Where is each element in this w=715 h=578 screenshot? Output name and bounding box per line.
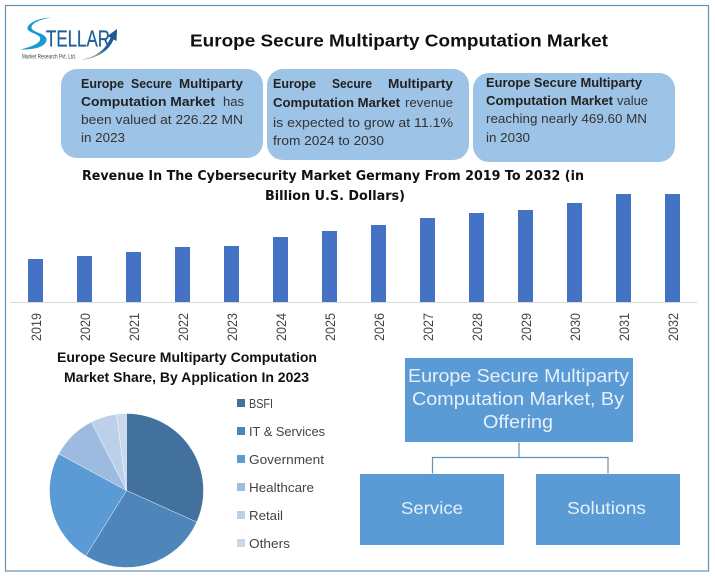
bar chart heading: Billion U.S. Dollars) bbox=[265, 189, 405, 204]
logo: Stellar Market Research: Market Research Pvt. Ltd. bbox=[22, 54, 76, 60]
bar chart: revenue 2019-2032 bbox=[10, 194, 697, 341]
callout: valued in 2023 bbox=[61, 69, 263, 158]
bar chart heading: Revenue In The Cybersecurity Market Germany From 2019 To 2032 (in bbox=[82, 169, 584, 184]
bar chart: revenue 2019-2032: 2027 bbox=[421, 313, 436, 341]
logo: Stellar Market Research: TELLAR bbox=[46, 26, 110, 52]
box: by offering: Europe Secure Multiparty bbox=[408, 365, 630, 386]
callout: value in 2030 bbox=[473, 73, 675, 162]
box: service bbox=[360, 474, 504, 545]
bar chart: revenue 2019-2032: 2020 bbox=[78, 313, 93, 341]
bar chart: revenue 2019-2032: 2026 bbox=[372, 313, 387, 341]
bar chart: revenue 2019-2032: 2024 bbox=[274, 313, 289, 341]
pie legend: BSFI bbox=[249, 396, 273, 411]
bar chart: revenue 2019-2032: 2023 bbox=[225, 313, 240, 341]
box: by offering: Offering bbox=[483, 411, 553, 432]
bar chart: revenue 2019-2032: 2021 bbox=[127, 313, 142, 341]
bar chart: revenue 2019-2032: 2032 bbox=[666, 313, 681, 341]
box: solutions bbox=[536, 474, 680, 545]
callout: valued in 2023: has bbox=[223, 95, 244, 109]
callout: growth rate: from 2024 to 2030 bbox=[273, 134, 384, 148]
pie legend bbox=[237, 396, 325, 551]
bar chart heading bbox=[82, 169, 584, 204]
box: service: Service bbox=[401, 498, 463, 518]
bar chart: revenue 2019-2032: 2029 bbox=[519, 313, 534, 341]
callout: growth rate: Multiparty bbox=[388, 77, 453, 91]
bar chart: revenue 2019-2032: 2031 bbox=[617, 313, 632, 341]
callout: growth rate: is expected to grow at 11.1% bbox=[273, 116, 453, 130]
pie legend: IT & Services bbox=[249, 424, 325, 439]
bar chart: revenue 2019-2032: 2019 bbox=[29, 313, 44, 341]
callout: valued in 2023: Secure bbox=[131, 77, 172, 91]
logo: Stellar Market Research bbox=[20, 18, 117, 60]
callout: valued in 2023: Multiparty bbox=[179, 77, 243, 91]
pie chart heading: Europe Secure Multiparty Computation bbox=[57, 350, 317, 365]
box: by offering bbox=[405, 358, 633, 442]
callout: growth rate: revenue bbox=[405, 96, 453, 110]
box: by offering: Computation Market, By bbox=[412, 388, 625, 409]
callout: value in 2030: value bbox=[617, 94, 648, 108]
pie chart heading: Market Share, By Application In 2023 bbox=[64, 370, 310, 385]
callout: growth rate: Secure bbox=[332, 77, 372, 91]
pie legend: Others bbox=[249, 536, 291, 551]
callout: growth rate: Computation Market bbox=[273, 96, 401, 110]
bar chart: revenue 2019-2032: 2025 bbox=[323, 313, 338, 341]
bar chart: revenue 2019-2032: 2028 bbox=[470, 313, 485, 341]
callout: valued in 2023: Computation Market bbox=[81, 95, 216, 109]
pie chart heading bbox=[57, 350, 317, 385]
callout: valued in 2023: Europe bbox=[81, 77, 124, 91]
callout: value in 2030: in 2030 bbox=[486, 131, 530, 145]
callout: value in 2030: reaching nearly 469.60 MN bbox=[486, 112, 647, 126]
title: Europe Secure Multiparty Computation Market bbox=[190, 30, 608, 50]
pie legend: Government bbox=[249, 452, 324, 467]
bar chart: revenue 2019-2032: 2022 bbox=[176, 313, 191, 341]
callout: growth rate: Europe bbox=[273, 77, 316, 91]
box: solutions: Solutions bbox=[567, 498, 646, 518]
pie legend: Healthcare bbox=[249, 480, 314, 495]
callout: valued in 2023: in 2023 bbox=[81, 131, 125, 145]
connector lines bbox=[432, 442, 608, 474]
pie legend: Retail bbox=[249, 508, 283, 523]
callout: value in 2030: Europe Secure Multiparty bbox=[486, 76, 642, 90]
bar chart: revenue 2019-2032: 2030 bbox=[568, 313, 583, 341]
pie chart: market share by application bbox=[49, 414, 203, 568]
callout: valued in 2023: been valued at 226.22 MN bbox=[81, 113, 243, 127]
callout: value in 2030: Computation Market bbox=[486, 94, 614, 108]
callout: growth rate bbox=[267, 69, 469, 160]
